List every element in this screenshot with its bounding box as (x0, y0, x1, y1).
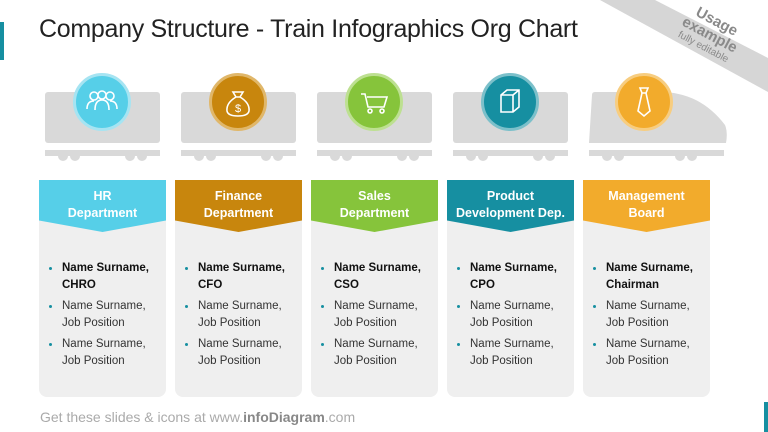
panel: Finance: Department (204, 206, 273, 220)
panel: Product: Name Surname, Job Position (470, 338, 554, 367)
panel: Finance (175, 180, 302, 397)
panel: HR: HR (93, 189, 112, 203)
train cars (45, 92, 727, 161)
panel: Sales: Name Surname, Job Position (334, 300, 418, 329)
panel: Finance: Name Surname, CFO (198, 262, 285, 291)
panel: HR: Name Surname, Job Position (62, 300, 146, 329)
icon: tie (615, 73, 673, 131)
panel: Management: Board (628, 206, 665, 220)
panel: HR: Name Surname, CHRO (62, 262, 149, 291)
panel: Management: Name Surname, Chairman (606, 262, 693, 291)
panel: Finance: Name Surname, Job Position (198, 300, 282, 329)
usage example ribbon: Usage (693, 4, 741, 40)
panel: Sales: Sales (358, 189, 391, 203)
icon: people (73, 73, 131, 131)
panel: HR: Department (68, 206, 137, 220)
usage example ribbon (600, 0, 768, 92)
panel: Finance: Name Surname, Job Position (198, 338, 282, 367)
panel: Product: Product (487, 189, 534, 203)
panel: Management: Name Surname, Job Position (606, 338, 690, 367)
icon: box (481, 73, 539, 131)
title: Company Structure - Train Infographics Org Chart (39, 15, 578, 43)
usage example ribbon: example (679, 13, 740, 57)
panel: Product (447, 180, 574, 397)
panel: Sales: Name Surname, CSO (334, 262, 421, 291)
panel: Product: Name Surname, Job Position (470, 300, 554, 329)
panel: Management (583, 180, 710, 397)
panel: HR (39, 180, 166, 397)
panel: Product: Development Dep. (456, 206, 565, 220)
icon: cart (345, 73, 403, 131)
panel: Finance: Finance (215, 189, 262, 203)
panel: Sales: Department (340, 206, 409, 220)
panel: Sales (311, 180, 438, 397)
panel: Management: Name Surname, Job Position (606, 300, 690, 329)
icon: money bag (209, 73, 267, 131)
panel: Product: Name Surname, CPO (470, 262, 557, 291)
usage example ribbon: fully editable (676, 29, 731, 65)
panel: Management: Management (608, 189, 685, 203)
icon: money bag: $ (235, 103, 241, 115)
panel: HR: Name Surname, Job Position (62, 338, 146, 367)
footer: Get these slides & icons at www.infoDiagram.com (40, 409, 355, 425)
panel: Sales: Name Surname, Job Position (334, 338, 418, 367)
left accent (0, 22, 4, 60)
right accent (764, 402, 768, 432)
